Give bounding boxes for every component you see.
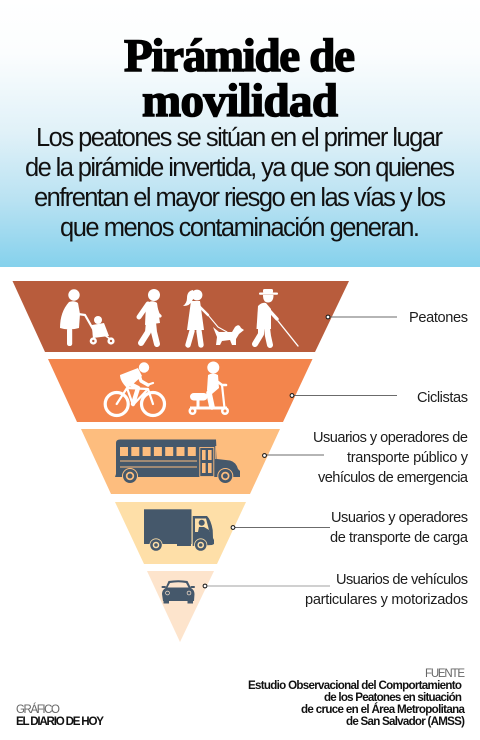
- label: transporte de carga: Usuarios y operadores: [331, 510, 468, 526]
- panel: tier 5 vehiculos particulares: [147, 571, 214, 642]
- icon: cyclist: [105, 362, 164, 416]
- label: transporte publico: transporte público y: [347, 450, 469, 466]
- source: fuente: de los Peatones en situación: [324, 691, 462, 704]
- title: Pirámide de: [124, 30, 355, 82]
- icon: walking person: [139, 289, 160, 344]
- icon: bus: [115, 440, 240, 484]
- intro text: [25, 124, 455, 242]
- label: transporte publico: vehículos de emergencia: [318, 470, 469, 486]
- title: [124, 30, 355, 127]
- icon: scooter rider: [188, 362, 229, 415]
- label: vehiculos particulares: Usuarios de vehículos: [336, 572, 468, 588]
- leader line: vehiculos particulares: [203, 584, 330, 588]
- leader line: transporte publico: [263, 454, 324, 457]
- source: fuente: [248, 668, 466, 728]
- label: vehiculos particulares: particulares y motorizados: [305, 592, 468, 608]
- label: transporte publico: [313, 430, 469, 486]
- source: fuente: Estudio Observacional del Comportamiento: [248, 679, 462, 692]
- header background: [0, 0, 480, 267]
- credit: grafico: EL DIARIO DE HOY: [16, 715, 104, 728]
- icon: truck: [144, 509, 214, 552]
- label: transporte publico: Usuarios y operadores de: [313, 430, 468, 446]
- label: transporte de carga: de transporte de carga: [330, 530, 469, 546]
- label: transporte de carga: [330, 510, 469, 546]
- leader line: peatones: [326, 315, 397, 319]
- leader line: transporte de carga: [231, 526, 330, 529]
- panel: tier 3 transporte publico: [81, 429, 280, 494]
- title: movilidad: [142, 75, 338, 127]
- label: vehiculos particulares: [305, 572, 468, 608]
- panel: tier 1 peatones: [12, 281, 349, 352]
- leader line: ciclistas: [290, 394, 397, 397]
- credit: grafico: GRÁFICO: [16, 703, 60, 716]
- intro text: que menos contaminación generan.: [60, 214, 420, 242]
- credit: grafico: [16, 703, 104, 728]
- intro text: de la pirámide invertida, ya que son quienes: [25, 154, 455, 182]
- panel: tier 2 ciclistas: [48, 359, 312, 422]
- icon: woman with guide dog: [183, 290, 244, 345]
- source: fuente: de San Salvador (AMSS): [346, 715, 465, 728]
- label: ciclistas: Ciclistas: [417, 390, 468, 406]
- source: fuente: de cruce en el Área Metropolitana: [301, 703, 466, 716]
- intro text: enfrentan el mayor riesgo en las vías y los: [34, 184, 446, 212]
- icon: blind person with cane: [255, 289, 298, 346]
- icon: car: [162, 580, 195, 604]
- intro text: Los peatones se sitúan en el primer lugar: [36, 124, 444, 152]
- panel: tier 4 transporte de carga: [115, 502, 246, 564]
- source: fuente: FUENTE: [425, 668, 465, 680]
- icon: mother with stroller: [60, 289, 115, 346]
- label: peatones: Peatones: [409, 310, 468, 326]
